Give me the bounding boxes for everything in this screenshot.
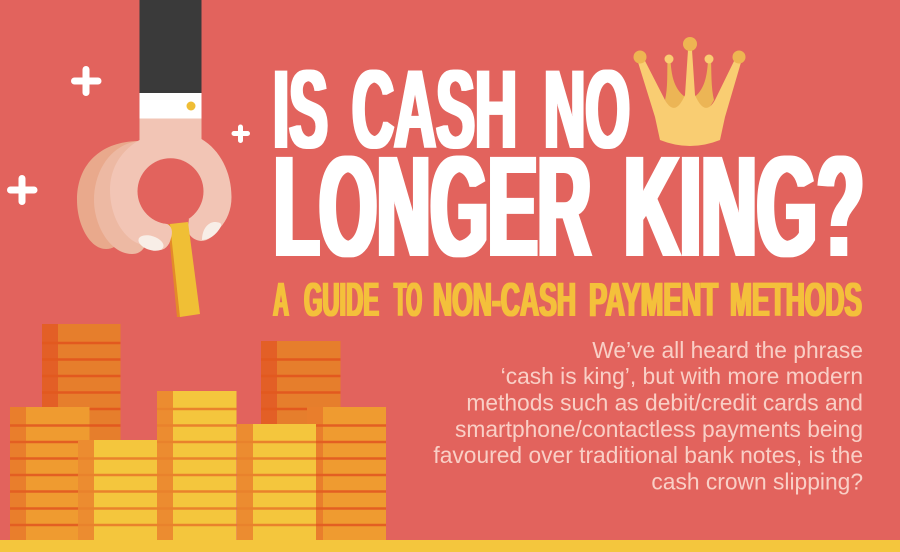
coin stack: back left <box>42 324 120 540</box>
coin stack: front yellow 3 <box>237 424 316 540</box>
cuff button <box>186 102 196 110</box>
subtitle: TO <box>394 274 422 327</box>
plus sign top <box>74 70 98 92</box>
intro text: ‘cash is king’, but with more modern <box>501 363 863 389</box>
back finger <box>77 141 140 249</box>
intro text: favoured over traditional bank notes, is the <box>433 442 863 468</box>
intro text: smartphone/contactless payments being <box>455 416 863 442</box>
sleeve <box>140 0 202 94</box>
coin stack: back right <box>261 341 340 540</box>
crown front <box>637 50 742 146</box>
middle finger <box>94 141 147 254</box>
intro text: cash crown slipping? <box>651 468 863 494</box>
subtitle: PAYMENT <box>589 274 718 327</box>
crown back spikes <box>665 60 714 112</box>
intro text: We’ve all heard the phrase <box>592 337 863 363</box>
illustration: hand holding a coin <box>77 0 232 317</box>
title: NO <box>544 47 630 172</box>
subtitle <box>273 274 862 327</box>
bottom band <box>0 540 900 552</box>
coin stack: middle right <box>307 407 386 540</box>
coin <box>170 222 200 317</box>
shirt cuff <box>140 93 202 118</box>
crown jewels <box>634 37 746 64</box>
hand and fingers <box>110 116 232 250</box>
illustration: stacks of coins <box>10 324 386 540</box>
coin stack: front yellow 1 <box>78 440 157 540</box>
finger tip over coin <box>140 222 172 250</box>
finger opening <box>138 158 204 224</box>
plus sign right <box>234 127 248 140</box>
title: CASH <box>352 47 517 172</box>
subtitle: NON-CASH <box>433 274 576 327</box>
icon: crown <box>634 37 746 146</box>
thumb nail left <box>136 232 166 254</box>
title: IS <box>273 47 328 172</box>
subtitle: A <box>273 274 289 327</box>
coin stack: front yellow 2 <box>157 391 236 540</box>
subtitle: GUIDE <box>304 274 379 327</box>
intro text: methods such as debit/credit cards and <box>466 390 863 416</box>
title: LONGER <box>274 126 591 287</box>
title <box>273 47 864 287</box>
intro text <box>433 337 863 494</box>
coin edge <box>168 224 181 317</box>
thumb nail right <box>202 222 221 240</box>
plus sign left <box>10 178 34 202</box>
coin stack: middle left <box>10 407 90 540</box>
